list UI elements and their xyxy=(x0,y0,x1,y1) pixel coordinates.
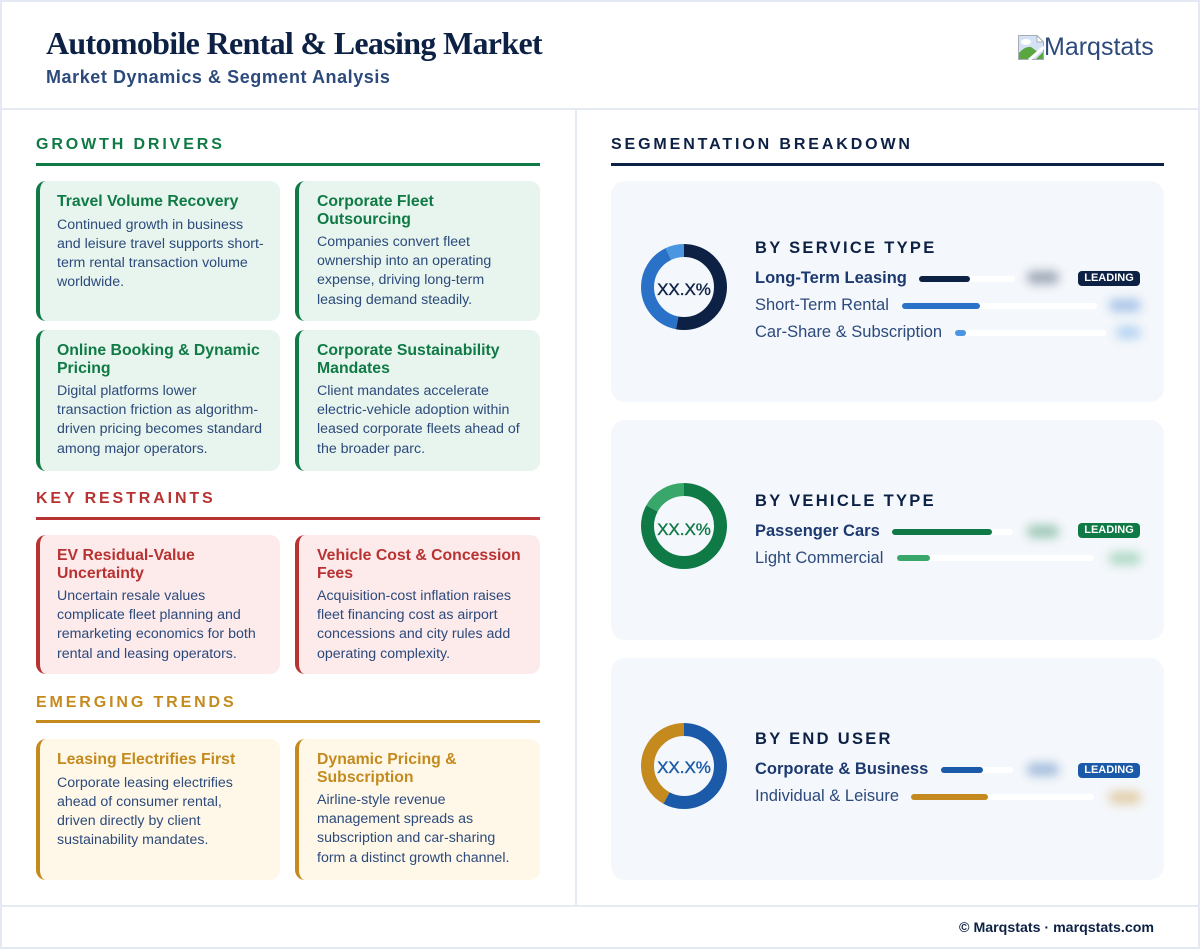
heading: key restraints: KEY RESTRAINTS xyxy=(36,490,216,507)
panel: by service type: X.X% xyxy=(1116,326,1141,338)
card: corporate fleet outsourcing: leasing demand steadily. xyxy=(317,292,472,308)
card: vehicle cost: Fees xyxy=(317,564,353,582)
donut: vehicle type xyxy=(641,483,727,569)
badge: leading: LEADING xyxy=(1084,524,1134,536)
badge: leading: LEADING xyxy=(1084,272,1134,284)
row: light commercial: Light Commercial xyxy=(755,549,883,567)
header xyxy=(0,0,1200,110)
card: corporate fleet outsourcing xyxy=(295,181,540,321)
card: travel volume recovery: Travel Volume Recovery xyxy=(57,193,238,210)
card: dynamic pricing: subscription and car-sharing xyxy=(317,830,495,846)
segment title: BY SERVICE TYPE xyxy=(755,239,937,257)
card: vehicle cost xyxy=(295,535,540,674)
donut: service type: XX.X% xyxy=(657,280,711,299)
divider xyxy=(575,110,577,905)
panel: by service type: XX.X% xyxy=(1027,272,1059,282)
card: online booking: driven pricing becomes standard xyxy=(57,421,262,437)
card: travel volume recovery xyxy=(36,181,280,321)
card: corporate fleet outsourcing: Outsourcing xyxy=(317,210,411,228)
panel: by end user: XX.X% xyxy=(1027,764,1059,774)
logo text: Marqstats xyxy=(1044,33,1154,61)
panel: by vehicle type: XX.X% xyxy=(1027,526,1059,536)
card: corporate sustainability: Corporate Sustainability xyxy=(317,342,500,359)
card: ev residual value: rental and leasing operators. xyxy=(57,646,237,662)
card: corporate sustainability: electric-vehicle adoption within xyxy=(317,402,509,418)
panel: by vehicle type: XX.X% xyxy=(1109,552,1141,564)
card: online booking: Pricing xyxy=(57,360,111,376)
donut: service type xyxy=(641,244,727,330)
card: corporate sustainability: the broader parc. xyxy=(317,441,425,457)
card: ev residual value: EV Residual-Value xyxy=(57,547,195,564)
segment title: BY END USER xyxy=(755,730,893,748)
card: dynamic pricing: form a distinct growth channel. xyxy=(317,850,509,866)
badge: leading xyxy=(1078,271,1140,286)
heading: growth drivers: GROWTH DRIVERS xyxy=(36,136,225,153)
card: corporate fleet outsourcing: Corporate Fleet xyxy=(317,193,434,210)
card: leasing electrifies: ahead of consumer rental, xyxy=(57,794,222,810)
card: corporate sustainability xyxy=(295,330,540,471)
row: car-share and subscription: Car-Share & Subscription xyxy=(755,323,942,341)
panel: emerging trends xyxy=(36,694,540,880)
row: passenger cars: Passenger Cars xyxy=(755,522,880,540)
card: corporate sustainability: Mandates xyxy=(317,360,390,376)
card: corporate fleet outsourcing: ownership into an operating xyxy=(317,253,491,269)
card: online booking xyxy=(36,330,280,471)
card: corporate fleet outsourcing: expense, driving long-term xyxy=(317,272,484,288)
card: leasing electrifies: sustainability mandates. xyxy=(57,832,208,848)
card: corporate sustainability: Client mandates accelerate xyxy=(317,383,489,399)
card: travel volume recovery: term rental transaction volume xyxy=(57,255,248,271)
row: individual and leisure: Individual & Leisure xyxy=(755,787,899,805)
card: vehicle cost: operating complexity. xyxy=(317,646,450,662)
heading: emerging trends: EMERGING TRENDS xyxy=(36,694,237,711)
card: online booking: among major operators. xyxy=(57,441,208,457)
row: corporate and business: Corporate & Business xyxy=(755,760,928,778)
card: travel volume recovery: and leisure travel supports short- xyxy=(57,236,264,252)
footer xyxy=(0,905,1200,949)
card: dynamic pricing: management spreads as xyxy=(317,811,473,827)
card: leasing electrifies xyxy=(36,739,280,880)
badge: leading xyxy=(1078,763,1140,778)
card: leasing electrifies: driven directly by client xyxy=(57,813,201,829)
panel: by end user: XX.X% xyxy=(1109,792,1141,802)
badge: leading xyxy=(1078,523,1140,538)
card: vehicle cost: Acquisition-cost inflation raises xyxy=(317,588,511,604)
donut: vehicle type: XX.X% xyxy=(657,520,711,539)
card: corporate fleet outsourcing: Companies convert fleet xyxy=(317,234,470,250)
panel: growth drivers xyxy=(36,136,540,471)
row: long-term leasing: Long-Term Leasing xyxy=(755,269,907,287)
card: vehicle cost: concessions and city rules add xyxy=(317,626,510,642)
badge: leading: LEADING xyxy=(1084,764,1134,776)
card: online booking: Online Booking & Dynamic xyxy=(57,342,260,359)
panel: by service type xyxy=(611,181,1164,402)
card: leasing electrifies: Leasing Electrifies First xyxy=(57,751,235,768)
row: short-term rental: Short-Term Rental xyxy=(755,296,889,314)
card: online booking: transaction friction as algorithm- xyxy=(57,402,258,418)
panel: by end user xyxy=(611,658,1164,880)
subtitle: Market Dynamics & Segment Analysis xyxy=(46,67,390,87)
icon: broken image xyxy=(1018,35,1044,60)
card: corporate sustainability: leased corporate fleets ahead of xyxy=(317,421,520,437)
card: ev residual value xyxy=(36,535,280,674)
title: Automobile Rental & Leasing Market xyxy=(46,25,542,61)
heading: segmentation breakdown: SEGMENTATION BREAKDOWN xyxy=(611,136,913,153)
card: ev residual value: remarketing economics for both xyxy=(57,626,256,642)
card: travel volume recovery: Continued growth in business xyxy=(57,216,243,232)
panel: key restraints xyxy=(36,490,540,674)
card: ev residual value: Uncertainty xyxy=(57,564,144,582)
panel: by vehicle type xyxy=(611,420,1164,640)
card: dynamic pricing: Subscription xyxy=(317,768,414,786)
donut: end user: XX.X% xyxy=(657,758,711,777)
card: dynamic pricing xyxy=(295,739,540,880)
logo: broken image icon and Marqstats text xyxy=(1018,33,1154,61)
panel: by service type: XX.X% xyxy=(1109,300,1141,310)
footer credit: © Marqstats · marqstats.com xyxy=(959,920,1154,936)
card: dynamic pricing: Dynamic Pricing & xyxy=(317,751,457,768)
donut: end user xyxy=(641,723,727,809)
card: vehicle cost: Vehicle Cost & Concession xyxy=(317,547,521,564)
card: leasing electrifies: Corporate leasing electrifies xyxy=(57,774,233,790)
card: ev residual value: complicate fleet planning and xyxy=(57,607,241,623)
segment title: BY VEHICLE TYPE xyxy=(755,492,936,510)
card: online booking: Digital platforms lower xyxy=(57,383,197,399)
card: vehicle cost: fleet financing cost as airport xyxy=(317,607,498,623)
card: travel volume recovery: worldwide. xyxy=(57,274,124,290)
card: dynamic pricing: Airline-style revenue xyxy=(317,792,446,808)
card: ev residual value: Uncertain resale values xyxy=(57,588,205,604)
